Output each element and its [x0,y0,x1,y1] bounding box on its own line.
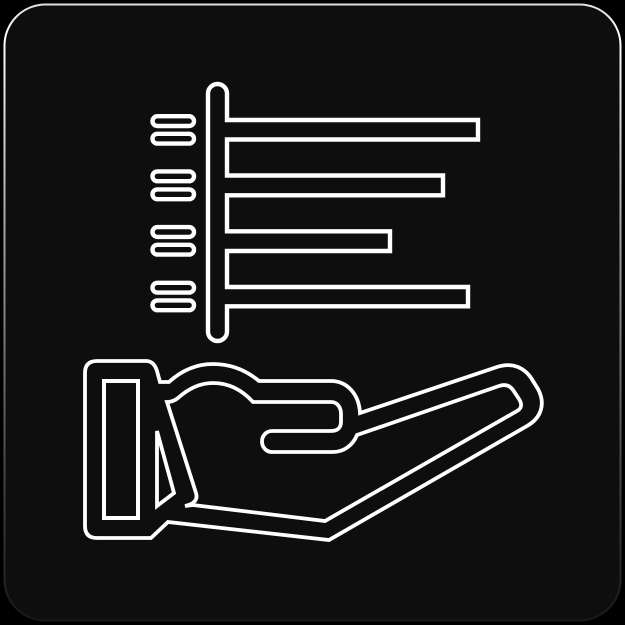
category label marks [152,116,194,310]
hand inner contour with fingers [167,383,521,521]
icon: open hand [85,361,542,540]
hand outer contour with cuff [85,361,542,540]
bar chart [152,84,478,341]
chart axis and bars outline [208,84,478,341]
cuff triangle [157,431,174,506]
cuff rectangle [104,381,138,518]
